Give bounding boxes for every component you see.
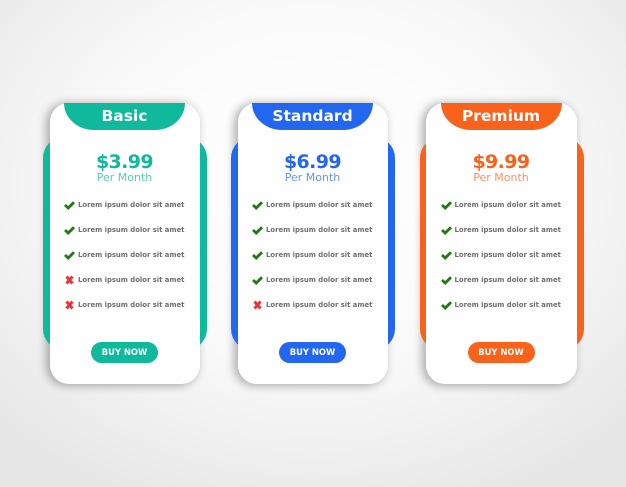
feature 1: Lorem ipsum dolor sit amet: [78, 201, 184, 209]
price: $9.99: [472, 150, 530, 172]
heading: Standard: [252, 103, 373, 130]
button: BUY NOW: [102, 347, 147, 357]
feature 3: Lorem ipsum dolor sit amet: [454, 251, 561, 259]
feature 3: Lorem ipsum dolor sit amet: [266, 251, 372, 259]
button: BUY NOW: [478, 347, 524, 357]
feature 4: Lorem ipsum dolor sit amet: [78, 276, 184, 284]
price period: Per Month: [285, 171, 340, 184]
button: [279, 342, 346, 363]
button: BUY NOW: [290, 347, 335, 357]
heading: Premium: Premium: [462, 107, 540, 125]
price period: Per Month: [97, 171, 152, 184]
price: $3.99: [96, 150, 153, 172]
feature 2: Lorem ipsum dolor sit amet: [454, 226, 561, 234]
panel: Basic plan: [40, 98, 207, 392]
price period: Per Month: [473, 171, 529, 184]
feature 1: Lorem ipsum dolor sit amet: [454, 201, 561, 209]
heading: Basic: [64, 103, 185, 130]
button: [468, 342, 534, 363]
feature 5: Lorem ipsum dolor sit amet: [266, 301, 372, 309]
side band: [420, 137, 584, 350]
price: $6.99: [284, 150, 341, 172]
card: [426, 103, 576, 384]
button: [91, 342, 158, 363]
card shadow: [50, 103, 200, 384]
feature 1: Lorem ipsum dolor sit amet: [266, 201, 372, 209]
feature 4: Lorem ipsum dolor sit amet: [266, 276, 372, 284]
card shadow: [238, 103, 388, 384]
heading: Standard: Standard: [272, 107, 353, 125]
panel: Premium plan: [416, 98, 584, 392]
feature 2: Lorem ipsum dolor sit amet: [78, 226, 184, 234]
feature 4: Lorem ipsum dolor sit amet: [454, 276, 561, 284]
side band: [231, 137, 395, 350]
feature 5: Lorem ipsum dolor sit amet: [78, 301, 184, 309]
panel: Standard plan: [228, 98, 395, 392]
feature 3: Lorem ipsum dolor sit amet: [78, 251, 184, 259]
card: [50, 103, 200, 384]
card: [238, 103, 388, 384]
side band: [43, 137, 207, 350]
heading: Basic: Basic: [101, 107, 148, 125]
feature 5: Lorem ipsum dolor sit amet: [454, 301, 561, 309]
heading: Premium: [440, 103, 562, 130]
card shadow: [426, 103, 576, 384]
feature 2: Lorem ipsum dolor sit amet: [266, 226, 372, 234]
